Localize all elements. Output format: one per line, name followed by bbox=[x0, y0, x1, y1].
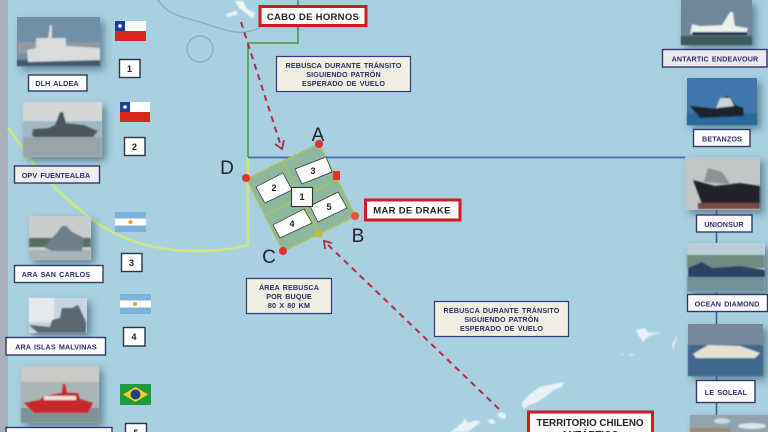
arrow: route from Cabo de Hornos bbox=[241, 22, 284, 149]
callout: Cabo de Hornos: CABO DE HORNOS bbox=[267, 12, 359, 23]
ship 4 photo bbox=[29, 298, 87, 333]
islands near Cabo de Hornos bbox=[226, 1, 255, 19]
callout: Territorio Chileno Antartico: TERRITORIO CHILENO bbox=[536, 418, 644, 429]
info box: transit search south: ESPERADO DE VUELO bbox=[460, 324, 543, 333]
route lines bbox=[8, 0, 686, 251]
right ship 2 label bbox=[694, 130, 750, 146]
info box: area per ship bbox=[246, 278, 332, 314]
right ship 5 label: LE SOLEAL bbox=[705, 388, 748, 397]
right ship 2 label: BETANZOS bbox=[702, 134, 742, 144]
left grey strip bbox=[0, 0, 8, 432]
corner letters: D bbox=[220, 158, 234, 179]
number box 2 bbox=[124, 138, 145, 156]
right ship 5 label bbox=[696, 380, 755, 402]
ship 4 label bbox=[6, 338, 106, 355]
info box: transit search north: SIGUIENDO PATRÓN bbox=[306, 70, 381, 79]
ship 3 label bbox=[14, 266, 103, 282]
right ship 5 photo bbox=[688, 324, 763, 376]
search area grid bbox=[247, 144, 355, 251]
right ship 1 label bbox=[662, 50, 767, 67]
blue latitude line bbox=[248, 156, 686, 158]
ship 5 photo bbox=[21, 366, 99, 423]
right ship 3 photo bbox=[685, 157, 760, 210]
ship 3 label: ARA SAN CARLOS bbox=[22, 270, 90, 279]
number box 5 bbox=[126, 424, 146, 432]
arrow: route from Antarctic territory bbox=[324, 241, 499, 409]
green boundary line bbox=[248, 0, 298, 157]
number box 3: 3 bbox=[129, 258, 134, 268]
ship 4 label: ARA ISLAS MALVINAS bbox=[15, 342, 97, 352]
callout: Mar de Drake: MAR DE DRAKE bbox=[373, 206, 451, 216]
callout: Mar de Drake bbox=[366, 200, 460, 220]
ship 1 photo bbox=[17, 17, 100, 66]
islands east bbox=[619, 328, 678, 356]
ship 3 photo bbox=[29, 216, 91, 260]
map outline: coast limit bbox=[158, 0, 262, 62]
ship 2 photo bbox=[23, 102, 102, 157]
search area markers bbox=[242, 140, 359, 255]
number box 3 bbox=[122, 254, 142, 272]
sector 3: 3 bbox=[310, 166, 316, 176]
sector 2: 2 bbox=[271, 183, 277, 193]
callout: Cabo de Hornos bbox=[260, 6, 366, 26]
right ship 1 label: ANTARTIC ENDEAVOUR bbox=[672, 54, 759, 64]
info box: transit search south bbox=[434, 302, 568, 336]
info box: area per ship: POR BUQUE bbox=[266, 292, 312, 301]
ship 5 label bbox=[6, 428, 112, 432]
number box 2: 2 bbox=[132, 142, 137, 152]
info box: area per ship: ÁREA REBUSCA bbox=[259, 283, 319, 292]
right ship 4 label: OCEAN DIAMOND bbox=[695, 300, 759, 308]
sector 1: 1 bbox=[299, 192, 305, 202]
sector 5: 5 bbox=[326, 202, 332, 212]
callout: Territorio Chileno Antartico bbox=[528, 412, 652, 432]
right ship 4 photo bbox=[687, 243, 765, 292]
number box 1: 1 bbox=[127, 64, 132, 74]
info box: transit search north: REBUSCA DURANTE TRÁNSITO bbox=[286, 61, 402, 70]
ship 2 label bbox=[14, 166, 100, 183]
flag: Chile bbox=[120, 102, 150, 122]
right ship 3 label: UNIONSUR bbox=[704, 220, 744, 229]
right ship 2 photo bbox=[687, 78, 757, 125]
number box 1 bbox=[120, 60, 140, 78]
number box 4: 4 bbox=[131, 332, 137, 342]
ship 1 label: DLH ALDEA bbox=[35, 79, 79, 88]
flag: Brazil bbox=[120, 384, 151, 405]
right ship 1 photo bbox=[681, 0, 752, 45]
Antarctic peninsula islands bbox=[450, 382, 564, 432]
info box: transit search south: SIGUIENDO PATRÓN bbox=[464, 315, 539, 324]
right ship 6 photo bbox=[690, 415, 768, 432]
right ship 3 label bbox=[696, 215, 752, 232]
sector 4: 4 bbox=[289, 219, 295, 229]
yellow-green boundary line bbox=[8, 128, 248, 251]
corner letters: C bbox=[262, 247, 276, 268]
number box 4 bbox=[124, 328, 145, 346]
ship 1 label bbox=[28, 75, 87, 91]
flag: Argentina bbox=[115, 212, 146, 232]
info box: transit search south: REBUSCA DURANTE TRÁNSITO bbox=[444, 306, 560, 315]
flag: Chile bbox=[115, 21, 146, 41]
info box: transit search north bbox=[276, 56, 410, 92]
ship 2 label: OPV FUENTEALBA bbox=[22, 171, 90, 180]
connector line: right column bbox=[716, 208, 718, 415]
corner letters bbox=[220, 125, 364, 268]
flag: Argentina bbox=[120, 294, 151, 314]
right ship 4 label bbox=[688, 294, 768, 312]
corner letters: B bbox=[352, 226, 364, 247]
corner letters: A bbox=[312, 125, 325, 146]
info box: transit search north: ESPERADO DE VUELO bbox=[302, 79, 385, 88]
info box: area per ship: 80 X 80 KM bbox=[268, 301, 310, 310]
